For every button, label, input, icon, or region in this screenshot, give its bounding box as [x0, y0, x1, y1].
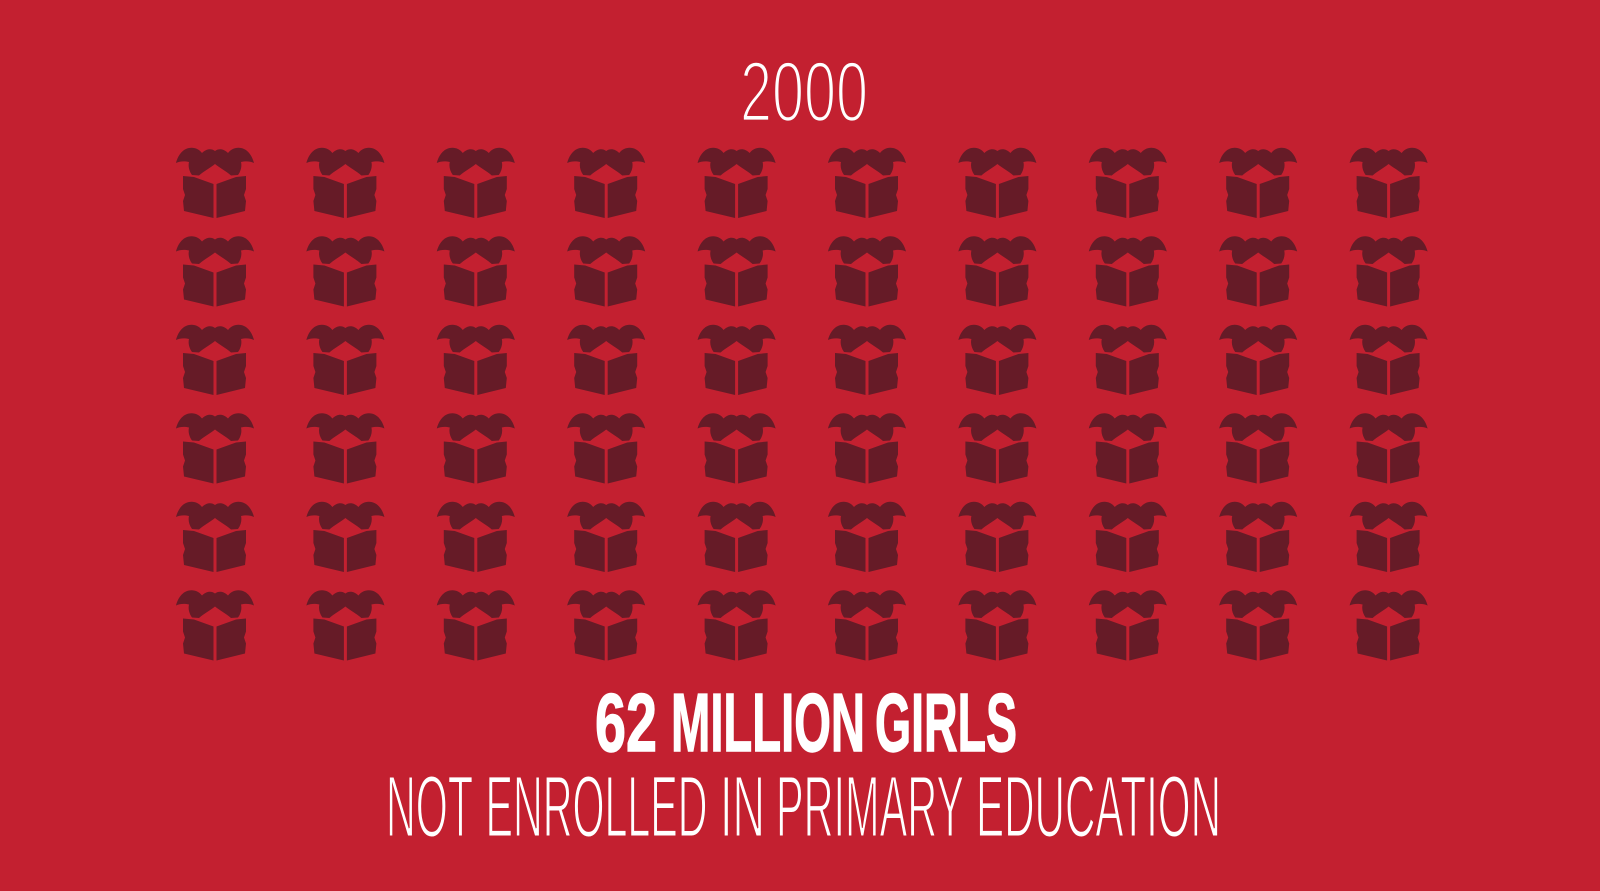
subheading: not enrolled: NOT [386, 758, 473, 856]
headline: 62 million girls: 62 [595, 676, 657, 769]
icon grid: girls reading books [176, 148, 1428, 660]
subheading: not enrolled: ENROLLED [486, 758, 708, 856]
icon row 4 [176, 413, 1428, 484]
icon row 2 [176, 236, 1428, 306]
infographic canvas: EDUCATION [976, 758, 1221, 856]
icon row 3 [176, 325, 1428, 395]
subheading: not enrolled: IN [720, 758, 765, 856]
icon row 6 [176, 590, 1428, 660]
subheading: not enrolled: PRIMARY [776, 758, 964, 856]
headline: 62 million girls: MILLION [671, 676, 865, 769]
headline: 62 million girls: GIRLS [875, 676, 1017, 769]
icon row 1 [176, 148, 1428, 218]
year heading: 2000 [740, 45, 868, 140]
subheading: not enrolled [386, 758, 1221, 856]
icon row 5 [176, 502, 1428, 572]
